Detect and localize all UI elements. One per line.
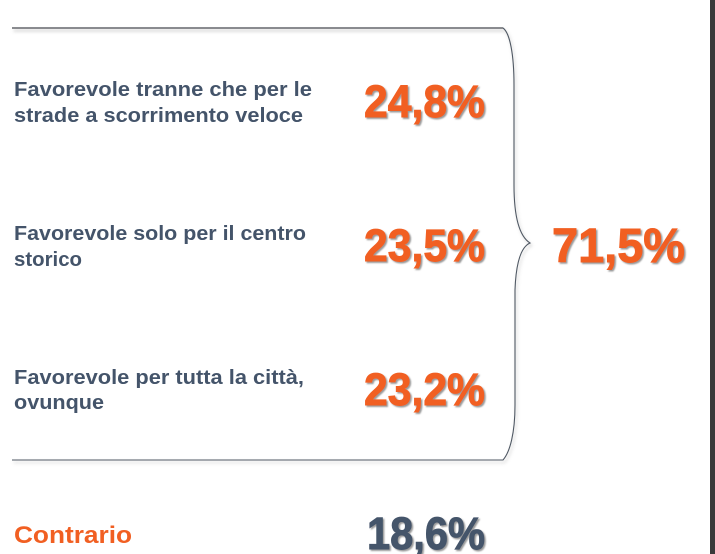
row: tranne strade a scorrimento veloce: 24,8%: [364, 76, 485, 127]
row: solo centro storico: [14, 220, 485, 271]
row: tranne strade a scorrimento veloce: strade a scorrimento veloce: [14, 105, 303, 127]
total percentage: 71,5%: [552, 220, 685, 273]
row: solo centro storico: storico: [14, 249, 82, 271]
row: tranne strade a scorrimento veloce: Favorevole tranne che per le: [14, 79, 312, 101]
row: tutta la città: [14, 364, 485, 415]
row: tutta la città: Favorevole per tutta la città,: [14, 367, 304, 389]
row: tutta la città: 23,2%: [364, 364, 485, 415]
right edge bar: [710, 0, 715, 554]
row: contrario: Contrario: [14, 522, 132, 549]
row: tutta la città: ovunque: [14, 392, 104, 414]
row: solo centro storico: Favorevole solo per il centro: [14, 223, 306, 245]
row: tranne strade a scorrimento veloce: [14, 76, 485, 127]
bracket grouping favourable answers: [12, 28, 530, 460]
row: contrario: [14, 508, 485, 554]
row: solo centro storico: 23,5%: [364, 220, 485, 271]
